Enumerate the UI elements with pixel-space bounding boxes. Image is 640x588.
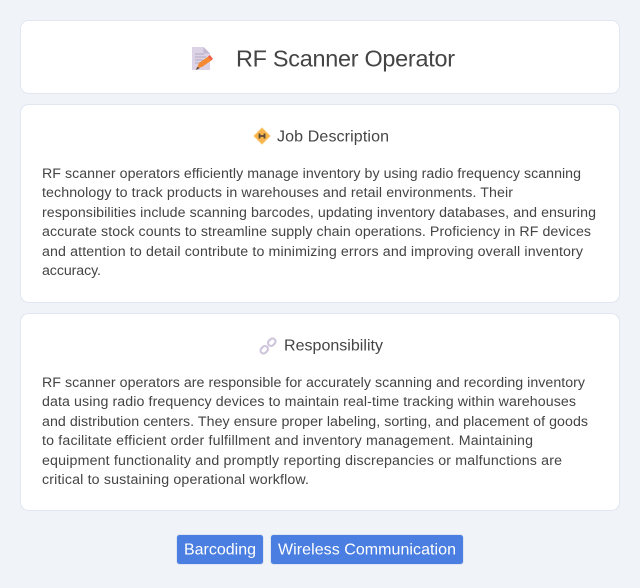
text block: job description: and attention to detail contribute to minimizing errors and improving overall inventory <box>42 244 584 260</box>
text block: responsibility: and distribution centers. They ensure proper labeling, sorting, and placement of goods <box>42 414 588 430</box>
text block: responsibility: critical to sustaining operational workflow. <box>42 472 309 488</box>
icon: document with pencil <box>192 47 213 70</box>
text block: job description: accurate stock counts to streamline supply chain operations. Proficiency in RF devices <box>42 224 591 240</box>
text block: responsibility <box>42 375 588 488</box>
icon: chain link <box>259 337 277 355</box>
tag: wireless communication: Wireless Communication <box>278 542 456 558</box>
heading: responsibility: Responsibility <box>284 338 383 354</box>
text block: job description: accuracy. <box>42 263 101 279</box>
tag: barcoding: Barcoding <box>184 542 256 558</box>
text block: job description: technology to track products in warehouses and retail environments. Their <box>42 185 513 201</box>
title: RF Scanner Operator <box>236 46 455 72</box>
panel: title card <box>20 20 620 94</box>
panel: responsibility <box>20 314 620 510</box>
tag: barcoding <box>176 534 264 564</box>
text block: job description: responsibilities include scanning barcodes, updating inventory databases, and ensuring <box>42 205 596 221</box>
text block: responsibility: data using radio frequency devices to maintain real-time tracking within warehouses <box>42 394 576 410</box>
tag: wireless communication <box>270 534 464 564</box>
icon: construction diamond <box>254 128 270 144</box>
panel: job description <box>20 104 620 302</box>
text block: job description <box>42 166 596 279</box>
text block: responsibility: to facilitate efficient order fulfillment and inventory management. Maintaining <box>42 433 533 449</box>
text block: responsibility: equipment functionality and promptly reporting discrepancies or malfunctions are <box>42 453 562 469</box>
text block: job description: RF scanner operators efficiently manage inventory by using radio frequency scanning <box>42 166 581 182</box>
text block: responsibility: RF scanner operators are responsible for accurately scanning and recording inventory <box>42 375 586 391</box>
heading: job description: Job Description <box>277 128 389 146</box>
